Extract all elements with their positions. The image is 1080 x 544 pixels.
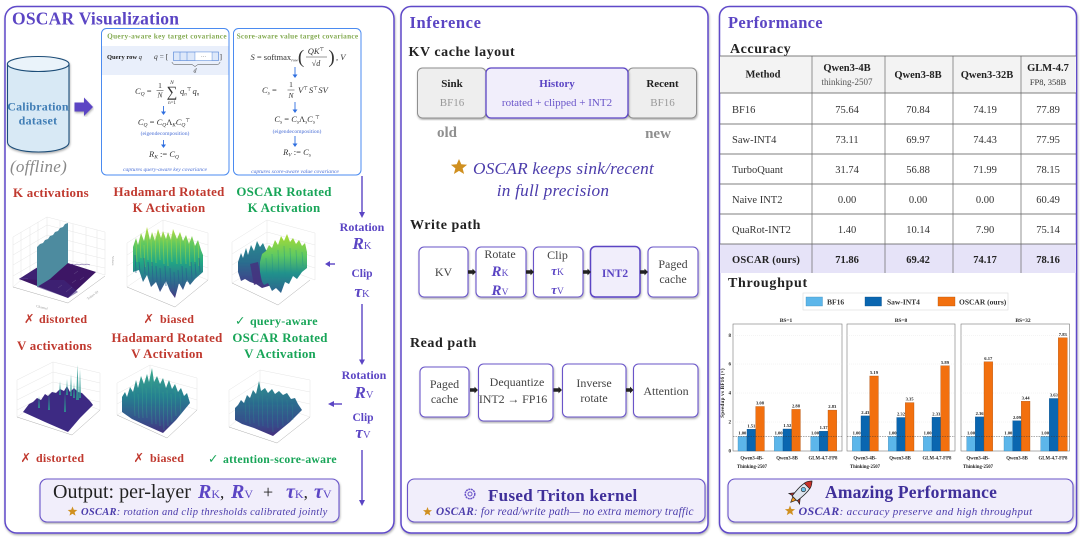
callout: OSCAR keeps sink/recent in full precision: OSCAR keeps sink/recent [473,159,655,178]
heading: Hadamard Rotated V Activation: V Activation [131,347,203,361]
panel: query-aware key target covariance: = [148,117,157,127]
panel: query-aware key target covariance: n [197,92,200,98]
diagram: KV cache layout: BF16 [650,97,675,109]
heading: OSCAR Rotated V Activation: OSCAR Rotated [232,331,328,345]
callout: OSCAR keeps sink/recent in full precision: in full precision [497,181,609,200]
panel: score-aware value target covariance: C [262,85,268,95]
diagram: read path: Dequantize [490,375,544,389]
diagram: KV cache layout: old [437,125,458,141]
heading: Write path: Write path [410,218,481,233]
panel: query-aware key target covariance: q [192,86,197,96]
table: accuracy: 74.19 [973,105,997,116]
y axis labels: 2 [728,420,732,426]
panel: query-aware key target covariance: C [138,117,144,127]
legend [803,293,1008,310]
chart panel: BS=1: BS=1 [780,318,793,324]
chart panel: BS=1: 3.08 [756,400,765,406]
chart panel: BS=8: 3.35 [906,397,914,402]
chart panel: BS=32: 3.44 [1022,395,1030,400]
panel: query-aware key target covariance: q = [ [154,52,169,61]
chart panel: BS=32 [961,318,1070,470]
chart panel: BS=32: 6.17 [984,356,993,361]
panel: score-aware value target covariance: C [291,114,297,124]
panel: query-aware key target covariance: q [180,86,184,96]
table: accuracy: 71.86 [835,255,859,266]
label: Rotation RV [342,368,387,402]
chart panel: BS=1: 1.00 [811,430,820,436]
chart panel: BS=1: 1.00 [775,430,783,436]
table: accuracy: 75.14 [1036,225,1061,236]
table: accuracy: 77.89 [1036,105,1060,116]
label: Rotation RK [340,220,385,253]
table: accuracy: 60.49 [1036,195,1060,206]
panel: query-aware key target covariance: N [156,90,163,100]
panel: score-aware value target covariance: s [280,120,282,126]
panel: query-aware key target covariance: C [135,86,141,96]
diagram: read path [420,364,698,421]
panel: query-aware key target covariance: ∑ [167,84,177,100]
chart panel: BS=8: 1.00 [924,430,932,436]
callout: Amazing Performance [728,476,1073,522]
panel: query-aware key target covariance: Q [181,122,185,128]
panel: score-aware value target covariance: C [307,114,313,124]
label: Clip tauK: τK [354,282,370,301]
heading: OSCAR Rotated V Activation: V Activation [244,347,316,361]
table: accuracy: QuaRot-INT2 [732,225,791,236]
table: accuracy [720,56,1076,273]
panel: query-aware key target covariance: Q [162,122,166,128]
heading: OSCAR Rotated K Activation: OSCAR Rotated [236,185,332,199]
table: accuracy: 0.00 [976,195,994,206]
chart panel: BS=32: 1.00 [1041,430,1050,436]
chart panel: BS=32: 3.63 [1050,392,1059,398]
arrow: to V activation [328,401,342,407]
panel: query-aware key target covariance: d [194,68,198,74]
chart panel: BS=8: 2.43 [861,410,870,415]
panel: score-aware value target covariance: s [268,90,270,96]
arrow: K clip to V rotation [359,304,365,365]
diagram: write path: Rotate [484,247,516,261]
heading: Hadamard Rotated K Activation: K Activation [133,201,205,215]
chart panel: BS=8: Thinking-2507 [850,465,881,470]
panel: query-aware key target covariance: Λ [166,117,173,127]
diagram: write path: τK [551,263,564,278]
diagram: KV cache layout: History [539,78,575,90]
diagram: KV cache layout: Sink [441,78,464,90]
diagram: write path: RK [491,264,509,280]
callout: output: τV [314,481,332,503]
table: accuracy: 77.95 [1036,135,1060,146]
heading: Hadamard Rotated V Activation: Hadamard Rotated [111,331,223,345]
callout: Fused Triton kernel: Fused Triton kernel [488,486,638,505]
table: accuracy: Saw-INT4 [732,135,777,146]
label: Rotation RV: RV [354,383,374,402]
chart panel: BS=1: 1.00 [738,430,747,436]
panel: score-aware value target covariance: captures score-aware value covariance [251,169,339,175]
panel: query-aware key target covariance: := [158,149,169,159]
heading: Hadamard Rotated K Activation [113,185,225,215]
label: query-aware: ✓ [235,313,245,328]
chart panel: BS=8 [847,318,955,470]
chart panel: BS=8: 2.33 [932,411,941,416]
heading: OSCAR Rotated V Activation [232,331,328,361]
table: accuracy: FP8, 358B [1030,77,1067,87]
label: attention-score-aware: ✓ [208,451,218,466]
label: query-aware: query-aware [250,314,318,328]
panel: score-aware value target covariance: ⊤ [320,47,325,53]
table: accuracy: Qwen3-32B [961,70,1013,81]
panel: score-aware value target covariance: s [305,120,307,126]
panel: score-aware value target covariance: Score-aware value target covariance [237,32,359,40]
panel: query-aware key target covariance: n [184,92,187,98]
panel: score-aware value target covariance: √d [312,59,321,68]
diagram: write path: Paged [658,257,688,271]
legend: Saw-INT4 [887,298,920,306]
panel: Performance [719,6,1076,533]
label: biased V: ✗ [134,450,144,465]
panel: score-aware value target covariance: V [298,85,303,95]
panel: query-aware key target covariance [102,28,229,175]
y axis labels: 8 [728,334,732,339]
label: biased K: ✗ [144,311,154,326]
panel: score-aware value target covariance: ⊤ [315,115,320,121]
chart panel: BS=8: Qwen3-8B [889,456,912,462]
heading: Inference: Inference [410,13,482,32]
panel: score-aware value target covariance: V [288,152,292,158]
panel: query-aware key target covariance: ··· [201,55,206,60]
chart panel: BS=32: BS=32 [1015,318,1031,324]
heading: V activations: V activations [17,339,92,353]
chart: Hadamard rotated K 3D surface [127,220,208,307]
panel: query-aware key target covariance: = [145,86,152,96]
table: accuracy: 7.90 [976,225,994,236]
y axis labels: 4 [728,392,732,396]
label: Clip tauK [351,268,373,301]
callout: OSCAR keeps sink/recent in full precision [451,159,655,200]
table: accuracy: 71.99 [973,165,997,176]
diagram: KV cache layout: Recent [646,78,679,90]
panel: query-aware key target covariance: captures query-aware key covariance [123,167,207,173]
table: accuracy: 70.84 [906,105,931,116]
panel: score-aware value target covariance: C [303,147,309,157]
panel: query-aware key target covariance: 1 [158,81,162,90]
diagram: read path: Inverse [576,376,612,390]
label: Rotation RV: Rotation [342,368,387,382]
table: accuracy: Qwen3-8B [894,70,942,81]
arrow: dataset to covariance [74,98,93,116]
panel: score-aware value target covariance: S [309,85,314,95]
diagram: write path: INT2 [602,268,628,280]
panel: query-aware key target covariance: ⊤ [185,118,190,124]
label: biased V [134,450,184,465]
y axis labels: 6 [728,362,732,368]
chart panel: BS=1: 1.52 [783,423,792,428]
callout: Amazing Performance: Amazing Performance [825,482,997,502]
panel: query-aware key target covariance: ⊤ [187,87,192,93]
panel: score-aware value target covariance: Λ [299,114,306,124]
chart panel: BS=32: Qwen3-4B- [966,456,990,462]
arrow: V clip to output [359,450,365,506]
panel: score-aware value target covariance: = [282,114,291,124]
chart panel: BS=8: 2.32 [897,412,906,416]
label: Clip tauV: Clip [352,412,374,424]
callout: output: RV [230,481,253,503]
arrow: covariance to rotation K [359,176,365,218]
diagram: write path: RV [491,283,509,299]
table: accuracy: 10.14 [906,225,931,236]
label: biased V: biased [150,451,184,465]
heading: Hadamard Rotated V Activation [111,331,223,361]
panel: score-aware value target covariance: s [309,152,311,158]
chart panel: BS=8: 1.00 [889,430,897,436]
chart panel: BS=8: GLM-4.7-FP8 [923,456,952,462]
table: accuracy: 75.64 [835,105,860,116]
panel: query-aware key target covariance: Q [144,122,148,128]
chart panel: BS=1: Thinking-2507 [737,465,768,470]
diagram: KV cache layout [418,68,696,142]
panel: score-aware value target covariance: C [274,114,280,124]
panel: query-aware key target covariance: Q [175,154,179,160]
diagram: read path: rotate [580,391,608,405]
panel: query-aware key target covariance: ] [220,52,222,61]
table: accuracy: 0.00 [838,195,856,206]
callout: output: RK, [197,481,224,503]
diagram: read path: cache [431,392,458,406]
text: offline: (offline) [10,157,67,176]
heading: Read path: Read path [410,336,477,351]
chart panel: BS=1: 1.51 [747,423,756,428]
label: Clip tauK: Clip [351,268,373,280]
chart panel: BS=32: 2.36 [976,411,984,416]
diagram: write path: cache [659,272,687,286]
table: accuracy: TurboQuant [732,165,783,176]
table: accuracy: 31.74 [835,165,860,176]
panel: score-aware value target covariance: ⊤ [303,86,308,92]
chart panel: BS=8: 5.89 [941,360,950,365]
legend: OSCAR (ours) [959,298,1007,306]
panel: score-aware value target covariance: QK [308,46,320,56]
table: accuracy: 74.17 [973,255,997,266]
icon: calibration dataset cylinder: dataset [19,114,57,128]
panel: score-aware value target covariance: (eigendecomposition) [273,128,322,135]
label: Clip tauV: τV [355,423,371,442]
label: distorted V: ✗ [20,450,31,465]
chart: OSCAR rotated K 3D surface [232,220,315,305]
label: distorted K: distorted [39,312,87,326]
panel: score-aware value target covariance: SV [318,85,330,95]
chart panel: BS=32: 1.00 [1004,430,1013,436]
chart: throughput speedup bars [719,318,1070,470]
chart: K activations 3D surface: Values [111,256,115,266]
chart: OSCAR rotated V 3D surface [229,370,310,443]
chart panel: BS=32: GLM-4.7-FP8 [1039,456,1068,462]
panel: score-aware value target covariance: ( [298,47,304,68]
y axis labels: Speedup vs BF16 (×) [719,368,726,418]
table: accuracy: Qwen3-4B [823,63,871,74]
heading: Hadamard Rotated K Activation: Hadamard Rotated [113,185,225,199]
diagram: write path: τV [551,282,564,297]
table: accuracy: GLM-4.7 [1027,63,1069,74]
table: accuracy: 56.88 [906,165,930,176]
chart panel: BS=32: 7.83 [1059,332,1068,337]
diagram: read path: INT2 → FP16 [479,392,547,406]
panel: score-aware value target covariance: s [297,120,299,126]
table: accuracy: 74.43 [973,135,997,146]
diagram: KV cache layout: BF16 [440,97,465,109]
diagram: read path: Attention [643,384,689,398]
table: accuracy: 69.97 [906,135,930,146]
chart panel: BS=32: Qwen3-8B [1006,456,1029,462]
table: accuracy: 0.00 [909,195,927,206]
heading: KV cache layout: KV cache layout [408,45,515,60]
panel: query-aware key target covariance: C [176,117,182,127]
panel: score-aware value target covariance: N [287,91,294,100]
callout: Amazing Performance: OSCAR: accuracy preserve and high throughput [798,504,1033,518]
icon: gear [465,489,475,499]
chart panel: BS=1: GLM-4.7-FP8 [809,456,838,462]
chart panel: BS=1: Qwen3-4B- [740,456,764,462]
diagram: write path: Clip [547,248,568,262]
diagram: write path: KV [435,265,452,279]
callout: output: OSCAR: rotation and clip thresholds calibrated jointly [81,507,328,518]
table: accuracy: 78.15 [1036,165,1060,176]
y axis labels: 0 [728,450,732,454]
panel: score-aware value target covariance: row [291,58,298,62]
chart panel: BS=1: 2.88 [792,403,801,408]
chart: V activations 3D surface [17,362,100,435]
panel: query-aware key target covariance: Query row q [107,54,143,61]
panel: query-aware key target covariance: K [171,124,176,128]
panel: score-aware value target covariance: s [313,120,315,126]
icon: calibration dataset cylinder [7,56,69,152]
panel: Inference [401,6,708,533]
chart panel: BS=8: Qwen3-4B- [853,456,877,462]
label: attention-score-aware: attention-score-aware [223,453,337,466]
label: distorted K: ✗ [24,311,34,326]
panel: query-aware key target covariance: K [153,154,158,160]
chart panel: BS=8: 5.19 [870,370,879,375]
panel: query-aware key target covariance: R [149,149,154,159]
heading: OSCAR Visualization: OSCAR Visualization [12,8,179,28]
heading: OSCAR Rotated K Activation [236,185,332,215]
panel: query-aware key target covariance: n=1 [168,101,176,106]
label: biased K [144,311,194,326]
label: Rotation RK: Rotation [340,220,385,234]
panel: query-aware key target covariance: (eigendecomposition) [141,130,190,137]
heading: Throughput: Throughput [728,276,808,291]
panel: score-aware value target covariance: = [270,85,277,95]
table: accuracy: 1.40 [838,225,856,236]
table: accuracy: BF16 [732,105,755,116]
panel: query-aware key target covariance: C [157,117,162,127]
callout: output [40,479,339,522]
diagram: KV cache layout: new [645,126,671,142]
label: distorted V: distorted [36,451,84,465]
heading: OSCAR Rotated K Activation: K Activation [248,201,320,215]
callout: output: + [263,482,273,502]
panel: score-aware value target covariance: S = softmax [250,52,291,62]
panel: OSCAR Visualization [5,6,394,533]
icon: calibration dataset cylinder: Calibration [7,100,69,114]
diagram: read path: Paged [430,377,459,391]
chart: K activations 3D surface: Channel [36,304,48,311]
panel: query-aware key target covariance: Q [141,92,145,98]
panel: score-aware value target covariance [234,28,361,175]
heading: K activations: K activations [13,186,89,200]
chart panel: BS=1 [733,318,842,470]
panel: score-aware value target covariance: R [283,147,288,157]
diagram: write path [419,246,698,299]
chart panel: BS=8: BS=8 [895,318,908,324]
table: accuracy: 78.16 [1036,255,1060,266]
label: Clip tauV [352,412,374,442]
table: accuracy: OSCAR (ours) [732,255,800,266]
chart panel: BS=8: 1.00 [853,430,861,436]
arrow: to K activation [325,261,335,267]
diagram: KV cache layout: rotated + clipped + INT2 [502,97,612,109]
callout: output: Output: per-layer [53,481,191,503]
chart panel: BS=1: Qwen3-8B [776,456,799,462]
panel: score-aware value target covariance: , V [336,52,347,62]
chart panel: BS=32: 1.00 [967,430,976,436]
chart: Hadamard rotated V 3D surface [117,365,197,438]
label: biased K: biased [160,312,194,326]
callout: Fused Triton kernel: OSCAR: for read/write path— no extra memory traffic [436,506,694,518]
panel: score-aware value target covariance: 1 [289,80,293,89]
y axis labels [719,334,732,454]
panel: score-aware value target covariance: ⊤ [313,86,318,92]
callout: Fused Triton kernel [408,479,705,522]
panel: query-aware key target covariance: C [169,149,175,159]
table: accuracy: 73.11 [835,135,859,146]
panel: score-aware value target covariance: ) [328,47,335,68]
chart panel: BS=1: 2.83 [828,404,837,409]
table: accuracy: Method [746,70,781,80]
callout: output: τK, [286,481,308,503]
heading: Performance: Performance [728,13,823,32]
chart: K activations 3D surface: Token ID [86,289,100,301]
heading: Accuracy: Accuracy [730,42,791,57]
icon: rocket [785,476,817,508]
label: Rotation RK: RK [352,234,372,253]
panel: query-aware key target covariance: Query-aware key target covariance [107,32,227,40]
chart panel: BS=32: 2.09 [1013,415,1022,420]
chart panel: BS=1: 1.37 [820,425,828,430]
table: accuracy: thinking-2507 [822,77,873,87]
chart panel: BS=32: Thinking-2507 [963,465,994,470]
panel: score-aware value target covariance: := [292,147,303,157]
legend: BF16 [827,298,844,306]
table: accuracy: 69.42 [906,255,930,266]
chart: K activations 3D surface [13,217,115,311]
table: accuracy: Naive INT2 [732,195,782,206]
panel: query-aware key target covariance: N [169,80,174,86]
